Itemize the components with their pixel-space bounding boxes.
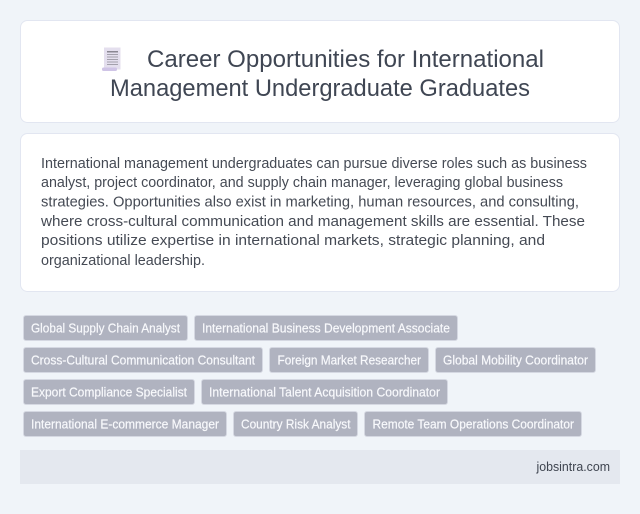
title: Management Undergraduate Graduates bbox=[110, 75, 530, 102]
tag: Cross-Cultural Communication Consultant bbox=[31, 352, 255, 368]
tag bbox=[24, 348, 262, 372]
text block: description: International management undergraduates can pursue diverse roles such as business bbox=[41, 155, 587, 172]
tag bbox=[194, 316, 458, 340]
tag bbox=[24, 412, 226, 436]
tag: Global Supply Chain Analyst bbox=[31, 320, 180, 336]
icon: document scroll bbox=[102, 48, 120, 71]
tag: International Business Development Associate bbox=[202, 320, 450, 336]
tag bbox=[24, 380, 194, 404]
panel: description bbox=[20, 134, 620, 292]
text block: description: positions utilize expertise in international markets, strategic planning, and bbox=[41, 232, 545, 249]
tag: Global Mobility Coordinator bbox=[443, 352, 589, 368]
tag: International Talent Acquisition Coordinator bbox=[209, 384, 441, 400]
tag: Remote Team Operations Coordinator bbox=[372, 416, 575, 432]
tag: Foreign Market Researcher bbox=[278, 352, 422, 368]
tag: Export Compliance Specialist bbox=[31, 384, 187, 400]
tag bbox=[24, 316, 188, 340]
tags: career roles bbox=[24, 316, 596, 436]
tag bbox=[234, 412, 358, 436]
footer source text: jobsintra.com bbox=[536, 460, 610, 474]
text block: description: organizational leadership. bbox=[41, 252, 205, 269]
text block: description bbox=[40, 155, 587, 269]
tag bbox=[270, 348, 428, 372]
title: Career Opportunities for International bbox=[147, 46, 544, 73]
text block: description: where cross-cultural communication and management skills are essential. These bbox=[40, 213, 585, 230]
tag: Country Risk Analyst bbox=[241, 416, 351, 432]
panel: header bbox=[20, 20, 620, 122]
text block: description: analyst, project coordinator, and supply chain manager, leveraging global business bbox=[41, 174, 563, 191]
text block: description: strategies. Opportunities also exist in marketing, human resources, and consulting, bbox=[41, 194, 579, 210]
tag bbox=[364, 412, 582, 436]
tag bbox=[436, 348, 596, 372]
footer bbox=[20, 450, 620, 484]
tag: International E-commerce Manager bbox=[31, 416, 220, 432]
tag bbox=[202, 380, 448, 404]
title bbox=[110, 46, 544, 102]
